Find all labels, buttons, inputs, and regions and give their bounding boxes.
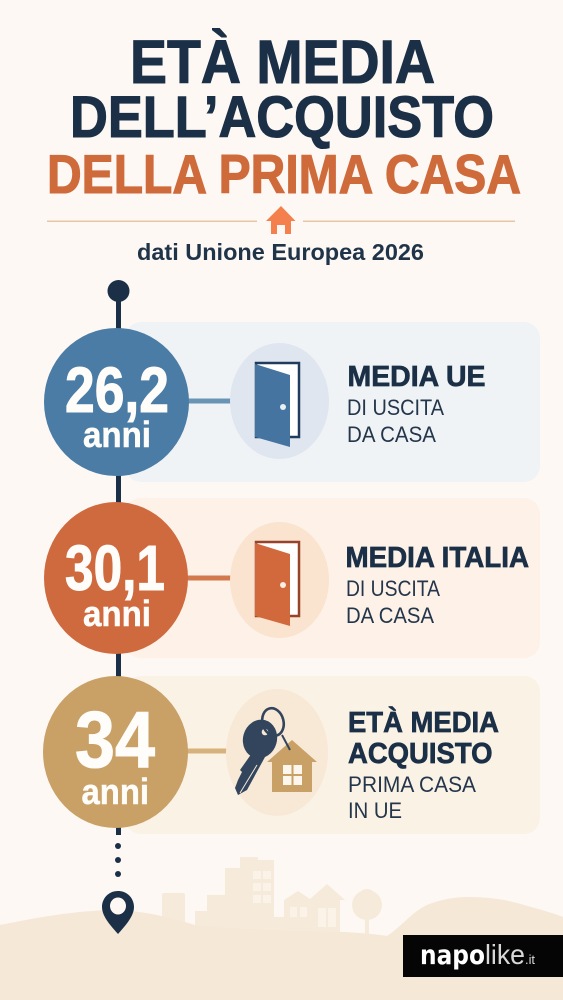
title: DELL’ACQUISTO <box>70 85 494 150</box>
icon: open orange door <box>230 522 329 638</box>
age circle 30,1: 30,1 <box>65 532 165 604</box>
logo: napolike.it: .it <box>525 952 535 967</box>
age circle 30,1 <box>44 502 188 654</box>
icon: location pin <box>102 891 134 934</box>
connector <box>186 748 230 754</box>
label: età media acquisto <box>348 705 499 823</box>
divider with house icon <box>47 206 515 234</box>
subtitle: dati Unione Europea 2026 <box>137 239 424 265</box>
panel: acquisto background <box>125 676 540 834</box>
logo: napolike.it: napo <box>420 940 485 971</box>
background skyline and hills <box>0 857 563 1000</box>
age circle 26,2: 26,2 <box>65 354 169 426</box>
connector <box>186 576 232 580</box>
age circle 34: anni <box>82 771 149 812</box>
label: età media acquisto: IN UE <box>348 798 402 823</box>
age circle 26,2: anni <box>83 414 151 455</box>
age circle 30,1: anni <box>83 593 151 634</box>
icon: key and house <box>226 689 328 816</box>
icon: open blue door <box>230 343 329 459</box>
age circle 34 <box>43 676 188 828</box>
title: ETÀ MEDIA <box>130 28 435 96</box>
label: media UE: DA CASA <box>347 422 436 447</box>
age circle 26,2 <box>44 328 189 476</box>
row 3: acquisto prima casa <box>43 676 499 828</box>
label: media Italia: MEDIA ITALIA <box>346 542 529 574</box>
label: età media acquisto: PRIMA CASA <box>348 772 476 797</box>
label: media UE <box>347 361 486 447</box>
logo: napolike.it: like <box>485 939 525 970</box>
panel: media UE background <box>125 322 540 482</box>
label: media Italia: DA CASA <box>346 603 434 628</box>
label: media Italia: DI USCITA <box>346 576 440 601</box>
panel: media Italia background <box>125 498 540 658</box>
label: età media acquisto: ETÀ MEDIA <box>348 705 499 739</box>
logo: napolike.it <box>403 935 563 977</box>
age circle 34: 34 <box>75 695 155 784</box>
label: media Italia <box>346 542 529 628</box>
connector <box>186 398 232 404</box>
row 1: media UE <box>44 328 486 476</box>
label: età media acquisto: ACQUISTO <box>348 738 492 770</box>
timeline <box>108 280 130 877</box>
label: media UE: MEDIA UE <box>348 361 486 393</box>
label: media UE: DI USCITA <box>347 395 444 420</box>
row 2: media Italia <box>44 502 529 654</box>
title <box>47 28 521 205</box>
